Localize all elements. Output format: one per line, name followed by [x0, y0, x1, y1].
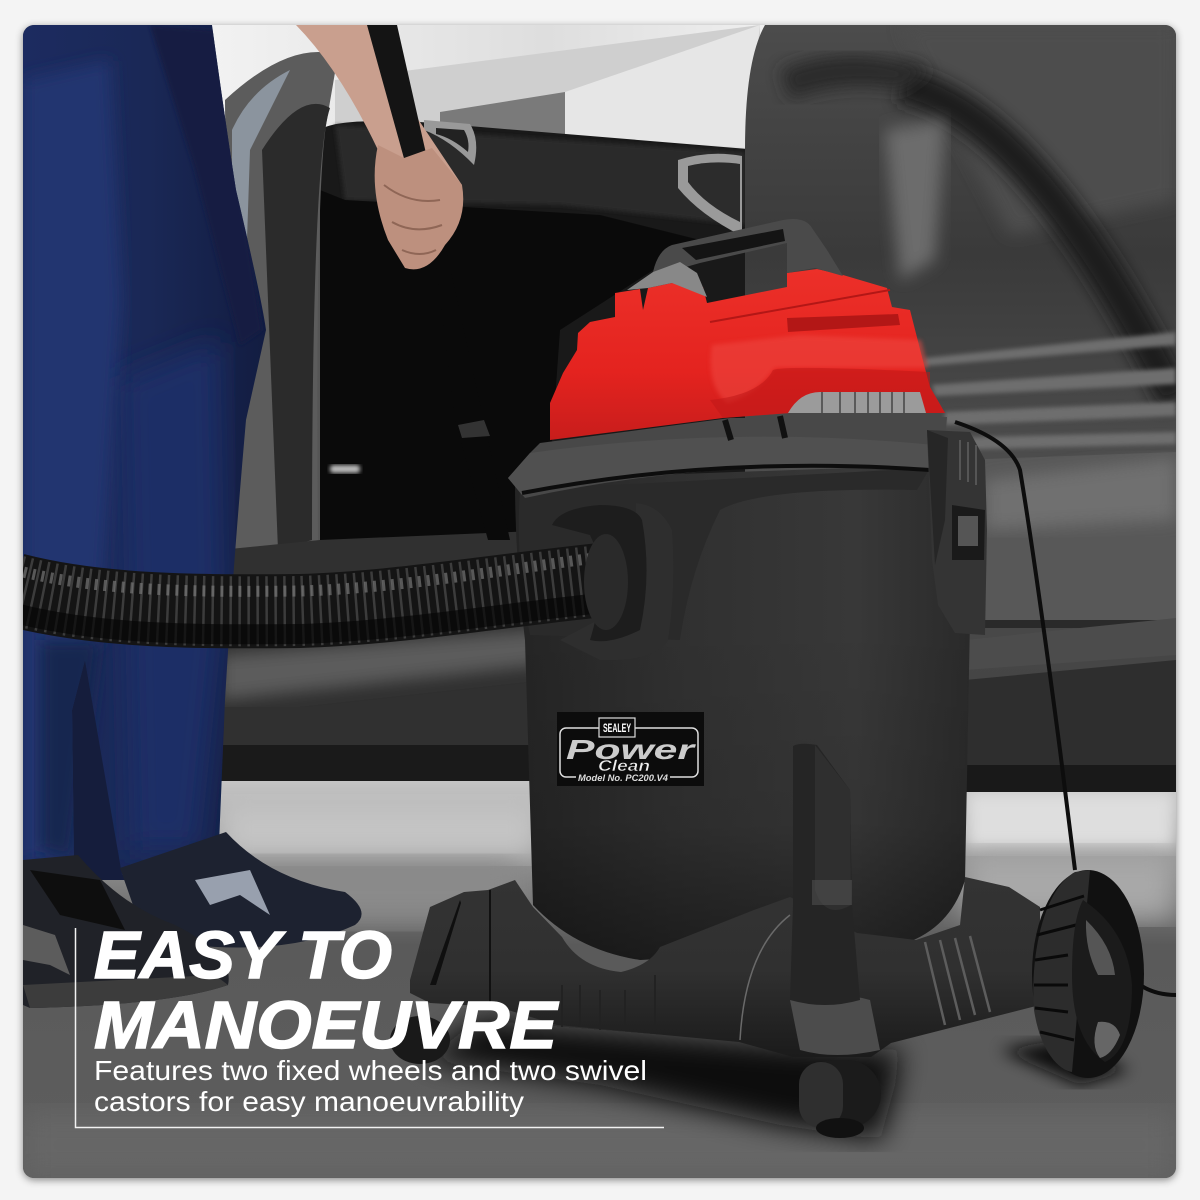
filter fins — [788, 392, 926, 413]
description: castors for easy manoeuvrability — [94, 1086, 524, 1117]
garage wall — [210, 25, 770, 160]
latch clip — [927, 430, 987, 635]
product label — [557, 712, 704, 786]
hose inlet fitting — [552, 505, 647, 641]
product label: Power — [566, 734, 697, 765]
red lid — [550, 269, 945, 440]
person: shoes — [23, 832, 362, 1008]
description — [94, 1055, 647, 1117]
bucket — [515, 465, 970, 960]
text block — [76, 918, 664, 1128]
hose inlet flange — [560, 503, 673, 660]
crevice nozzle tool — [790, 744, 860, 1005]
product label: Clean — [598, 758, 650, 775]
person: hand — [375, 145, 463, 269]
product label: Model No. PC200.V4 — [578, 773, 668, 783]
car door interior — [320, 121, 745, 540]
base with castors — [410, 877, 1040, 1057]
garage floor — [23, 775, 1176, 1180]
vacuum cleaner — [15, 219, 1176, 1138]
collar rim — [508, 416, 947, 498]
vacuum shadow on floor — [420, 1020, 1130, 1140]
person: forearm — [296, 25, 462, 185]
handle — [627, 219, 843, 297]
heading: MANOEUVRE — [94, 988, 559, 1063]
product label: SEALEY — [603, 723, 631, 735]
person: trousers — [23, 25, 273, 885]
large rear wheel — [1032, 870, 1144, 1078]
vacuum hose wand — [367, 25, 510, 540]
car body right — [745, 25, 1176, 792]
frame lines — [76, 928, 664, 1128]
heading — [94, 918, 559, 1063]
flexible hose — [15, 556, 620, 634]
description: Features two fixed wheels and two swivel — [94, 1055, 647, 1086]
car sill — [220, 530, 560, 781]
power cable — [955, 422, 1176, 995]
back left castor — [390, 1016, 450, 1064]
car door vents — [424, 120, 742, 236]
front castor — [799, 1062, 874, 1138]
car pillar — [225, 52, 338, 570]
gap between legs — [72, 660, 124, 880]
heading: EASY TO — [94, 918, 392, 993]
